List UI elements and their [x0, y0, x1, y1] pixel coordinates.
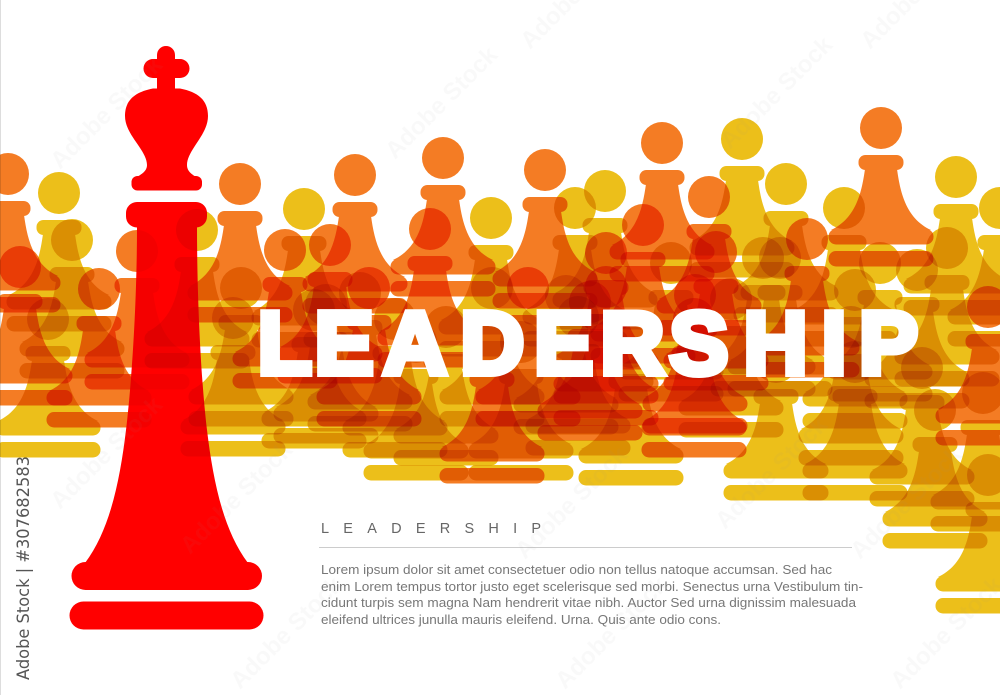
- pawn crowd: [0, 107, 1000, 614]
- stock watermark: Adobe Stock: [380, 41, 503, 164]
- stock watermark: Adobe Stock: [710, 411, 833, 534]
- stock watermark: Adobe Stock: [715, 31, 838, 154]
- stock watermark: Adobe Stock: [550, 571, 673, 694]
- stock watermark: Adobe Stock: [45, 51, 168, 174]
- body paragraph: cidunt turpis sem magna Nam hendrerit vitae nibh. Auctor Sed urna dignissim malesuada: [321, 595, 857, 610]
- stock watermark: Adobe Stock: [225, 571, 348, 694]
- divider line: [319, 547, 852, 548]
- stock watermark: Adobe Stock: [510, 441, 633, 564]
- king head: [125, 88, 208, 178]
- title: LEADERSHIP: [258, 294, 918, 392]
- body paragraph: eleifend ultrices junulla mauris eleifend. Urna. Quis ante odio cons.: [321, 612, 721, 627]
- stock watermark: Adobe Stock: [175, 436, 298, 559]
- king bottom bar: [70, 602, 264, 630]
- king neck collar: [126, 202, 207, 228]
- king base: [72, 562, 262, 590]
- red king chess piece: [70, 46, 264, 630]
- stock id side label: Adobe Stock | #307682583: [14, 456, 34, 680]
- stock watermark: Adobe Stock: [845, 441, 968, 564]
- body paragraph: Lorem ipsum dolor sit amet consectetuer odio non tellus natoque accumsan. Sed hac: [321, 562, 833, 577]
- subheading: LEADERSHIP: [321, 521, 541, 537]
- king cross: [144, 46, 190, 90]
- stock watermark: Adobe Stock: [45, 391, 168, 514]
- body paragraph: enim Lorem tempus tortor justo eget scelerisque sed morbi. Senectus urna Vestibulum tin-: [321, 579, 863, 594]
- king head collar: [132, 176, 202, 190]
- body paragraph: [321, 562, 863, 627]
- king body: [85, 226, 248, 563]
